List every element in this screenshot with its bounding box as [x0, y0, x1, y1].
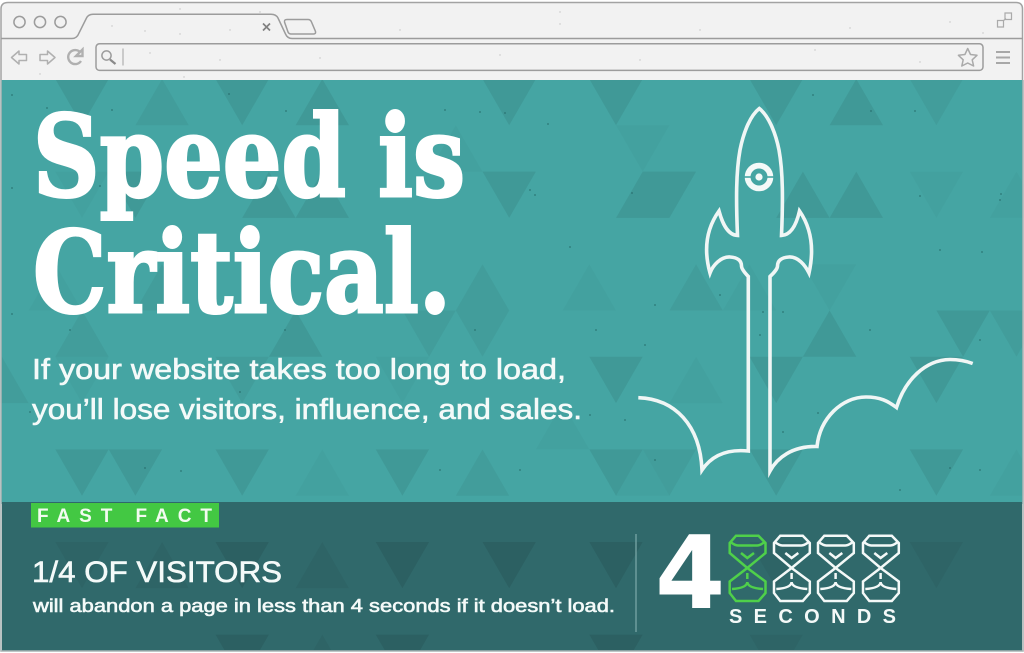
panel: fast fact band — [2, 502, 1022, 653]
browser tab — [1, 14, 1023, 39]
rocket porthole — [744, 163, 774, 191]
seconds label: SECONDS — [729, 606, 896, 628]
panel: teal hero background — [0, 79, 1024, 504]
divider — [635, 534, 637, 632]
search icon — [102, 51, 116, 64]
subheading text: If your website takes too long to load, — [32, 354, 566, 386]
heading: Speed is Critical — [33, 92, 465, 339]
panel: browser chrome — [1, 2, 1023, 80]
tab close icon — [263, 24, 270, 30]
heading: Speed is Critical: Speed is — [33, 92, 465, 223]
forward arrow — [40, 51, 55, 64]
back arrow — [12, 51, 26, 64]
text cursor — [122, 48, 124, 66]
hourglass: second 3 — [818, 536, 854, 601]
address bar — [96, 44, 983, 70]
big number 4: 4 — [655, 514, 725, 632]
new tab button — [284, 20, 316, 34]
fast fact label: FAST FACT — [37, 506, 212, 527]
subheading text — [32, 354, 582, 426]
hourglass: elapsed second (green) — [730, 536, 766, 601]
subheading text: you’ll lose visitors, influence, and sales. — [32, 394, 582, 426]
star icon — [958, 48, 977, 66]
hourglass: second 2 — [774, 536, 810, 601]
icon: rocket launch outline — [638, 108, 973, 471]
fact detail text: will abandon a page in less than 4 seconds if it doesn’t load. — [32, 595, 615, 616]
expand icon — [998, 13, 1012, 27]
heading: Speed is Critical: Critical. — [33, 208, 451, 339]
window control dots — [14, 16, 66, 28]
reload icon — [68, 50, 82, 64]
fact headline: 1/4 OF VISITORS — [32, 556, 282, 589]
hourglass: second 4 — [863, 536, 899, 601]
stat: 4 seconds — [655, 514, 899, 632]
menu icon — [996, 52, 1010, 63]
